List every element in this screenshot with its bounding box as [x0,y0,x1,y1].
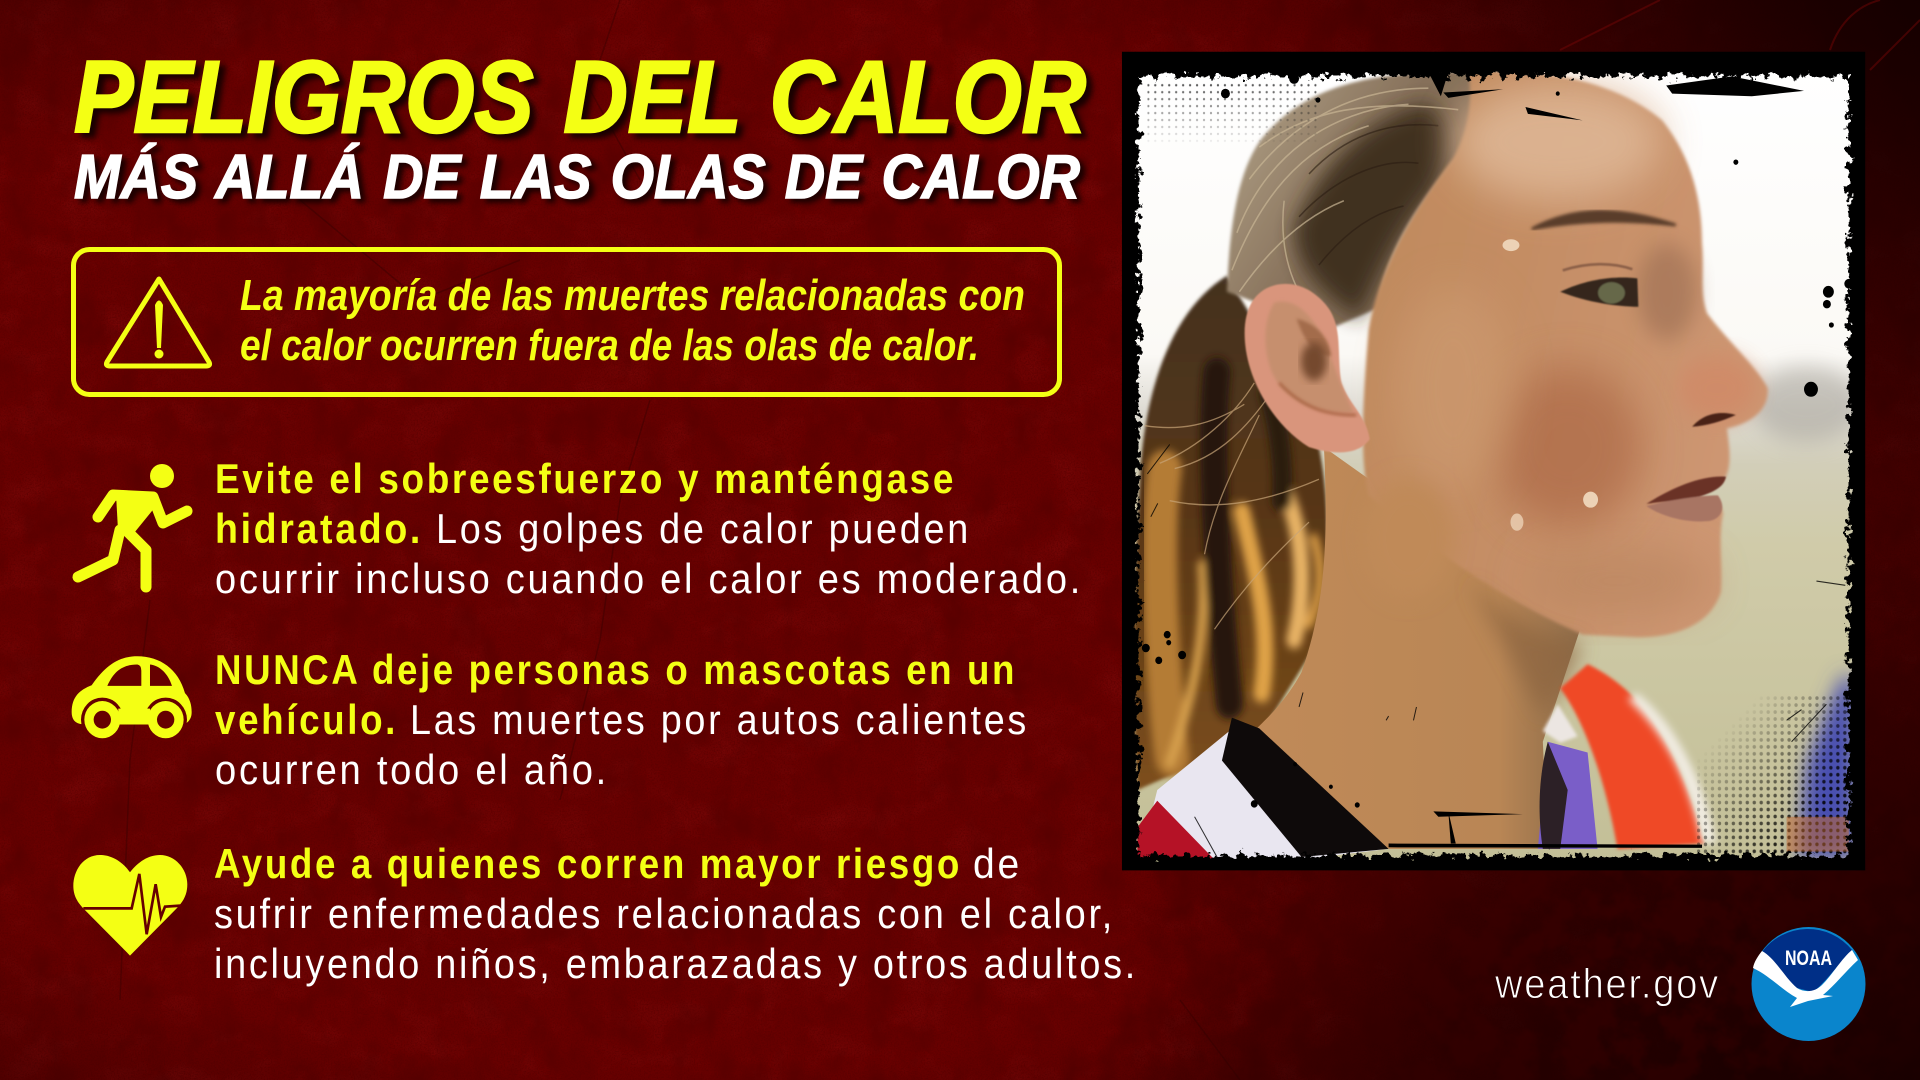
NOAA logo [1752,927,1866,1041]
face [1363,71,1768,637]
item 1 text: hidratado. [215,505,423,552]
item 2 text: vehículo. [215,696,398,743]
item 1 text: Evite el sobreesfuerzo y manténgase [215,455,956,502]
item 3 text: incluyendo niños, embarazadas y otros adultos. [214,940,1138,987]
icon: warning triangle [106,279,210,366]
icon: car [72,656,192,742]
grunge inner edge [1110,40,1876,881]
callout text [240,271,1025,370]
item 3 text: Ayude a quienes corren mayor riesgo [214,840,962,887]
ponytail [1134,276,1327,790]
item 2 text: NUNCA deje personas o mascotas en un [215,646,1017,693]
item 1 text: ocurrir incluso cuando el calor es moderado. [215,555,1083,602]
callout box [74,250,1060,394]
item 3 text [214,840,1138,987]
item 3 text: de [973,840,1022,887]
callout text: La mayoría de las muertes relacionadas con [240,271,1025,320]
eye [1560,264,1638,307]
ink specks [1142,72,1853,848]
photo: black frame with sweating athlete portrait [1110,40,1876,881]
face shading [1364,83,1757,715]
neck [1254,447,1580,849]
eyebrow [1533,212,1675,229]
halftone patches [1147,80,1851,854]
icon: running person [78,464,187,587]
NOAA logo: NOAA [1785,947,1832,970]
item 2 text: Las muertes por autos calientes [410,696,1029,743]
photo sky and field [1135,69,1856,862]
item 2 text: ocurren todo el año. [215,746,609,793]
item 1 text: Los golpes de calor pueden [436,505,971,552]
ear [1245,284,1370,452]
jersey [1137,664,1856,860]
icon: heart with pulse [73,855,187,956]
hair on head [1227,71,1498,329]
weather.gov label: weather.gov [1494,960,1720,1007]
nostril and lips [1646,413,1736,521]
callout text: el calor ocurren fuera de las olas de calor. [240,321,979,370]
item 2 text [215,646,1029,793]
sweat drops [1503,239,1598,531]
title: PELIGROS DEL CALOR [74,40,1086,154]
item 1 text [215,455,1083,602]
subtitle: MÁS ALLÁ DE LAS OLAS DE CALOR [74,143,1080,212]
item 3 text: sufrir enfermedades relacionadas con el calor, [214,890,1115,937]
